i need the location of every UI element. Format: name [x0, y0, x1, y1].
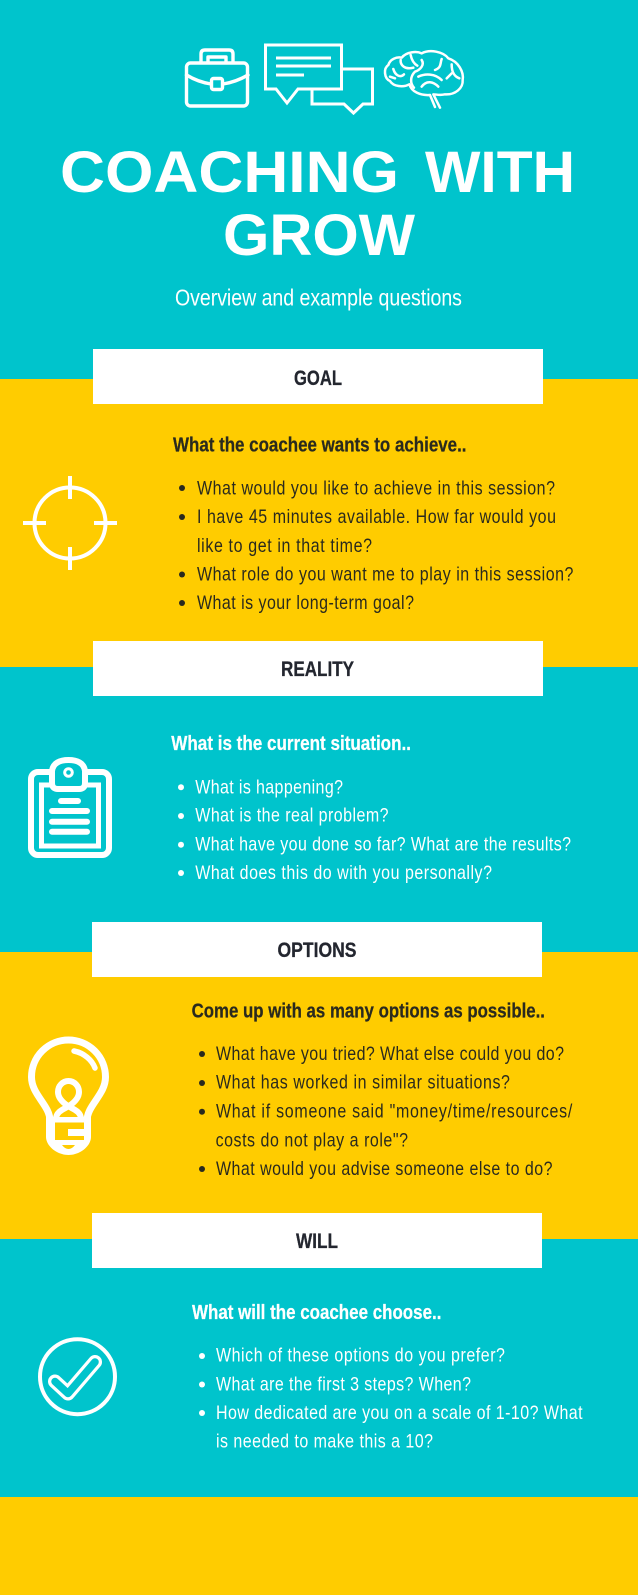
goal question list: I have 45 minutes available. How far would you — [197, 506, 556, 527]
reality question list: What does this do with you personally? — [195, 862, 492, 883]
options question list: What have you tried? What else could you do? — [216, 1043, 564, 1064]
heading bar: goal — [93, 349, 543, 404]
panel: will — [40, 1213, 583, 1452]
heading bar: reality: REALITY — [281, 657, 354, 681]
goal question list: What role do you want me to play in this session? — [197, 563, 574, 585]
will question list: is needed to make this a 10? — [216, 1430, 433, 1452]
panel: options background — [0, 952, 638, 1239]
will question list: How dedicated are you on a scale of 1-10? What — [216, 1402, 583, 1423]
reality question list: What is the real problem? — [195, 804, 389, 826]
heading bar: will: WILL — [296, 1229, 338, 1253]
reality question list: What is happening? — [195, 776, 343, 798]
options question list: What would you advise someone else to do? — [216, 1158, 553, 1179]
panel: reality — [31, 641, 571, 883]
subtitle: Overview and example questions — [175, 285, 462, 311]
heading bar: reality — [93, 641, 543, 696]
panel: options — [32, 922, 572, 1179]
title: WITH — [425, 140, 575, 205]
will subheading: What will the coachee choose.. — [192, 1301, 441, 1324]
heading bar: options: OPTIONS — [278, 938, 356, 962]
title — [60, 140, 575, 268]
icon: light bulb — [32, 1040, 106, 1155]
panel: will background — [0, 1239, 638, 1497]
options question list — [199, 1043, 572, 1179]
heading bar: goal: GOAL — [294, 366, 342, 390]
panel: header background — [0, 0, 638, 379]
heading bar: options — [92, 922, 542, 977]
panel: goal — [23, 349, 574, 613]
icon: briefcase — [186, 50, 248, 106]
panel: goal background — [0, 379, 638, 667]
goal question list: like to get in that time? — [197, 535, 372, 556]
goal subheading: What the coachee wants to achieve.. — [173, 434, 466, 456]
title: COACHING — [60, 140, 399, 205]
icon: clipboard — [31, 760, 109, 855]
will question list: Which of these options do you prefer? — [216, 1344, 505, 1366]
icon: target — [23, 476, 117, 570]
reality subheading: What is the current situation.. — [171, 732, 411, 755]
icon: speech bubbles — [266, 45, 372, 113]
options question list: costs do not play a role"? — [216, 1129, 408, 1151]
reality question list: What have you done so far? What are the results? — [195, 833, 571, 855]
will question list: What are the first 3 steps? When? — [216, 1373, 471, 1395]
panel: footer band — [0, 1497, 638, 1595]
icon: brain — [385, 51, 463, 108]
goal question list: What would you like to achieve in this session? — [197, 477, 555, 499]
title: GROW — [223, 203, 415, 268]
goal question list — [179, 477, 574, 613]
goal question list: What is your long-term goal? — [197, 592, 414, 613]
options question list: What has worked in similar situations? — [216, 1071, 510, 1093]
icon: check mark in circle — [40, 1339, 115, 1414]
panel: reality background — [0, 667, 638, 952]
options subheading: Come up with as many options as possible.. — [192, 999, 545, 1022]
reality question list — [178, 776, 571, 883]
heading bar: will — [92, 1213, 542, 1268]
will question list — [199, 1344, 583, 1452]
options question list: What if someone said "money/time/resources/ — [216, 1100, 572, 1122]
